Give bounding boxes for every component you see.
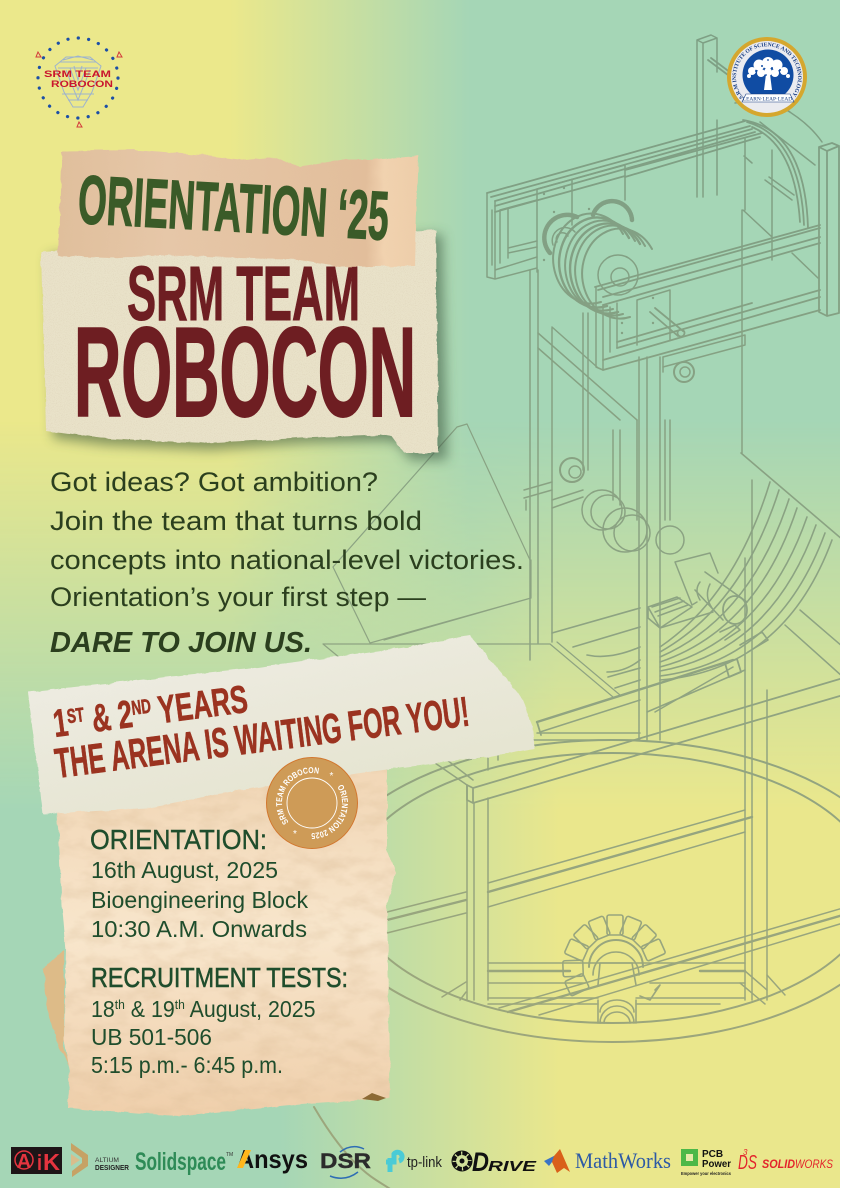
stamp: SRM TEAM ROBOCON	[276, 767, 319, 825]
logo: PCB Power	[681, 1149, 731, 1176]
title: ROBOCON: ROBOCON	[74, 301, 416, 443]
stamp: *	[293, 829, 297, 840]
recruitment details: 18	[91, 996, 115, 1022]
logo: SRM Institute seal: LEARN·LEAP·LEAD	[743, 96, 792, 102]
logo: PCB Power: Empower your electronics	[681, 1171, 731, 1176]
recruitment details: UB 501-506	[91, 1024, 212, 1050]
stamp	[266, 757, 358, 849]
curved ribs	[552, 453, 843, 688]
intro text: concepts into national-level victories.	[50, 545, 524, 575]
recruitment details: th	[115, 998, 125, 1012]
logo: ODrive: D	[472, 1147, 489, 1177]
logo: SRM Institute seal: S.R.M INSTITUTE OF SCIENCE AND TECHNOLOGY	[732, 42, 802, 99]
stamp: *	[330, 771, 334, 782]
logo: tp-link	[386, 1152, 442, 1172]
logo: PCB Power: PCB	[702, 1149, 723, 1160]
intro text: Join the team that turns bold	[50, 506, 422, 536]
banner text: years: & 2	[82, 693, 135, 742]
orientation details: ORIENTATION:	[90, 824, 267, 855]
upper rails	[487, 121, 820, 740]
omni wheel	[563, 915, 666, 1023]
pulley and gears	[544, 201, 652, 319]
stamp: ORIENTATION 2025	[312, 785, 348, 839]
logo: Altium Designer: DESIGNER	[95, 1165, 129, 1172]
logo: AiK: K	[43, 1149, 60, 1175]
logo: SRM Team Robocon: ROBOCON	[51, 79, 113, 90]
logo: AiK	[11, 1147, 62, 1175]
logo: MathWorks: MathWorks	[575, 1148, 671, 1173]
orientation details	[90, 824, 308, 942]
banner strip	[28, 636, 535, 814]
sponsor logos	[11, 1143, 833, 1178]
logo: PCB Power: Power	[702, 1158, 731, 1170]
logo: SolidWorks: WORKS	[795, 1159, 833, 1171]
top post and guide arc	[697, 35, 839, 453]
title: SRM TEAM: SRM TEAM	[127, 251, 360, 337]
logo: SRM Institute seal	[727, 37, 807, 117]
orientation details: Bioengineering Block	[91, 887, 308, 913]
call to action: DARE TO JOIN US.	[50, 627, 312, 659]
orientation details: 10:30 A.M. Onwards	[91, 916, 307, 942]
recruitment details	[91, 962, 348, 1078]
banner text: years: ST	[66, 703, 86, 728]
intro text: Got ideas? Got ambition?	[50, 467, 378, 497]
recruitment details: th	[175, 998, 185, 1012]
logo: SRM Team Robocon	[36, 38, 122, 127]
intro text	[50, 467, 524, 659]
banner text: years: YEARS	[149, 678, 250, 734]
logo: SolidWorks	[738, 1148, 833, 1174]
title: Orientation '25: ORIENTATION ‘25	[76, 161, 391, 255]
flat plate and triangle	[323, 424, 620, 697]
recruitment details: & 19	[125, 996, 175, 1022]
logo: AiK: A	[17, 1151, 31, 1173]
logo: Altium Designer	[71, 1143, 129, 1177]
logo: Ansys: Ansys	[237, 1144, 308, 1174]
logo: tp-link: tp-link	[407, 1154, 442, 1171]
motor	[648, 553, 747, 628]
lower bearings and pulleys	[524, 458, 684, 554]
recruitment details: August, 2025	[185, 996, 316, 1022]
logo: DSR	[320, 1147, 371, 1178]
logo: ODrive: RIVE	[488, 1158, 537, 1175]
logo: AiK: i	[37, 1150, 42, 1175]
large ring	[314, 740, 843, 1192]
banner text: arena: THE ARENA IS WAITING FOR YOU!	[52, 688, 472, 787]
heading panel: tan strip	[58, 150, 418, 267]
cross bars	[387, 810, 843, 1015]
robot line art	[314, 35, 843, 1192]
logo: DSR: DSR	[320, 1150, 371, 1173]
logo: SolidWorks: DS	[738, 1152, 757, 1174]
logo: ODrive	[452, 1147, 537, 1177]
logo: Solidspace: Solidspace	[135, 1148, 226, 1176]
diagonal beams	[435, 480, 843, 1000]
orientation details: 16th August, 2025	[91, 857, 278, 883]
logo: SRM Team Robocon: SRM TEAM	[44, 69, 111, 80]
info paper	[43, 768, 396, 1116]
banner text: years: ND	[130, 695, 152, 720]
logo: Solidspace: TM	[226, 1152, 233, 1158]
recruitment details: 5:15 p.m.- 6:45 p.m.	[91, 1052, 283, 1078]
banner text: years: 1	[51, 701, 71, 746]
heading panel: sand paper	[41, 230, 447, 460]
logo: SolidWorks: SOLID	[762, 1159, 795, 1171]
logo: Altium Designer: ALTIUM	[95, 1157, 119, 1164]
recruitment details: RECRUITMENT TESTS:	[91, 962, 348, 993]
intro text: Orientation’s your first step —	[50, 582, 426, 612]
logo: SolidWorks: 3	[743, 1148, 748, 1157]
